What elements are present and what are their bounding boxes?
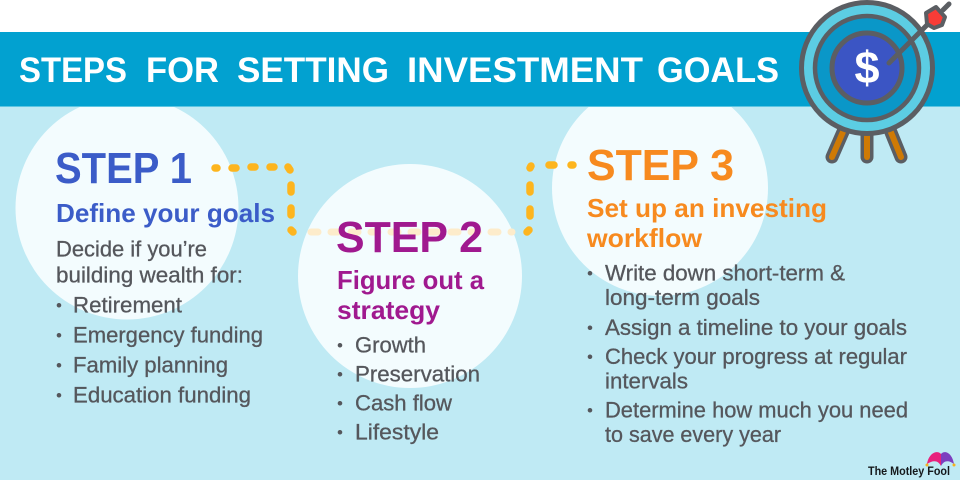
- logo wordmark: The Motley Fool: [868, 466, 950, 478]
- title: STEPS: [19, 51, 127, 90]
- step 2 list: •: [337, 336, 343, 355]
- step 2 list: •: [337, 365, 343, 384]
- step 3 list: Assign a timeline to your goals: [605, 315, 907, 340]
- step 1 list: Retirement: [73, 292, 182, 318]
- title: SETTING: [237, 51, 389, 90]
- jester hat: [926, 452, 956, 466]
- step 2 list: •: [337, 394, 343, 413]
- step 3 list: •: [587, 318, 593, 338]
- step 2 list: Lifestyle: [355, 420, 439, 444]
- step 3 list: Write down short-term &: [605, 260, 845, 286]
- step 3 list: intervals: [605, 368, 688, 394]
- step 2 list: Growth: [355, 332, 426, 358]
- target legs: [832, 125, 901, 157]
- arrow: faded dotted connector behind step 2: [311, 228, 512, 236]
- title: [19, 51, 779, 90]
- step 3 list: long-term goals: [605, 285, 760, 310]
- step 2 list: [337, 332, 480, 444]
- step 2 subheading: Figure out a: [337, 265, 485, 295]
- circle: step 2 backdrop: [298, 164, 522, 388]
- step 3 list: [587, 260, 908, 447]
- step 3 list: •: [587, 348, 593, 366]
- step 2 heading: STEP 2: [336, 213, 483, 262]
- step 3 subheading: Set up an investing: [587, 193, 827, 223]
- step 2 subheading: strategy: [337, 295, 441, 325]
- title: GOALS: [657, 51, 779, 90]
- step 3 subheading: [586, 193, 827, 253]
- step 3 list: Determine how much you need: [605, 398, 908, 422]
- step 1 heading: STEP 1: [55, 144, 192, 193]
- step 2 text block: [336, 213, 485, 444]
- step 1 list: [56, 292, 263, 408]
- arrow: dotted connector step 1 to step 2: [215, 167, 293, 232]
- step 1 list: Emergency funding: [73, 322, 263, 348]
- step 1 intro: [56, 236, 243, 288]
- step 1 subheading: Define your goals: [56, 198, 275, 228]
- circle: step 3 backdrop: [552, 80, 768, 296]
- step 1 list: •: [56, 296, 62, 315]
- step 1 intro: building wealth for:: [56, 262, 243, 288]
- step 3 list: •: [587, 401, 593, 420]
- step 1 intro: Decide if you’re: [56, 236, 207, 262]
- step 1 list: •: [56, 356, 62, 375]
- step 1 text block: [55, 144, 275, 408]
- step 1 list: •: [56, 326, 62, 345]
- step 2 subheading: [337, 265, 485, 325]
- step 3 list: to save every year: [605, 422, 781, 447]
- step 3 subheading: workflow: [586, 223, 703, 253]
- dollar sign: $: [854, 42, 880, 93]
- step 3 heading: STEP 3: [587, 141, 734, 190]
- arrow: dotted connector step 2 to step 3: [527, 165, 573, 232]
- title: FOR: [146, 51, 219, 90]
- target rings: [802, 2, 932, 134]
- step 2 list: Preservation: [355, 362, 480, 386]
- top white strip: [0, 0, 960, 32]
- logo: The Motley Fool: [868, 452, 956, 478]
- circle: step 1 backdrop: [16, 96, 238, 320]
- step 1 list: •: [56, 386, 62, 405]
- icon: target with dollar and dart: [802, 2, 949, 157]
- step 1 list: Education funding: [73, 382, 251, 408]
- step 3 text block: [586, 141, 908, 447]
- step 3 list: Check your progress at regular: [605, 344, 907, 369]
- header band: [0, 32, 960, 107]
- dart: [889, 4, 949, 63]
- title: INVESTMENT: [407, 51, 643, 90]
- step 1 list: Family planning: [73, 352, 228, 378]
- step 3 list: •: [587, 264, 593, 283]
- step 2 list: Cash flow: [355, 390, 452, 416]
- step 2 list: •: [337, 423, 343, 442]
